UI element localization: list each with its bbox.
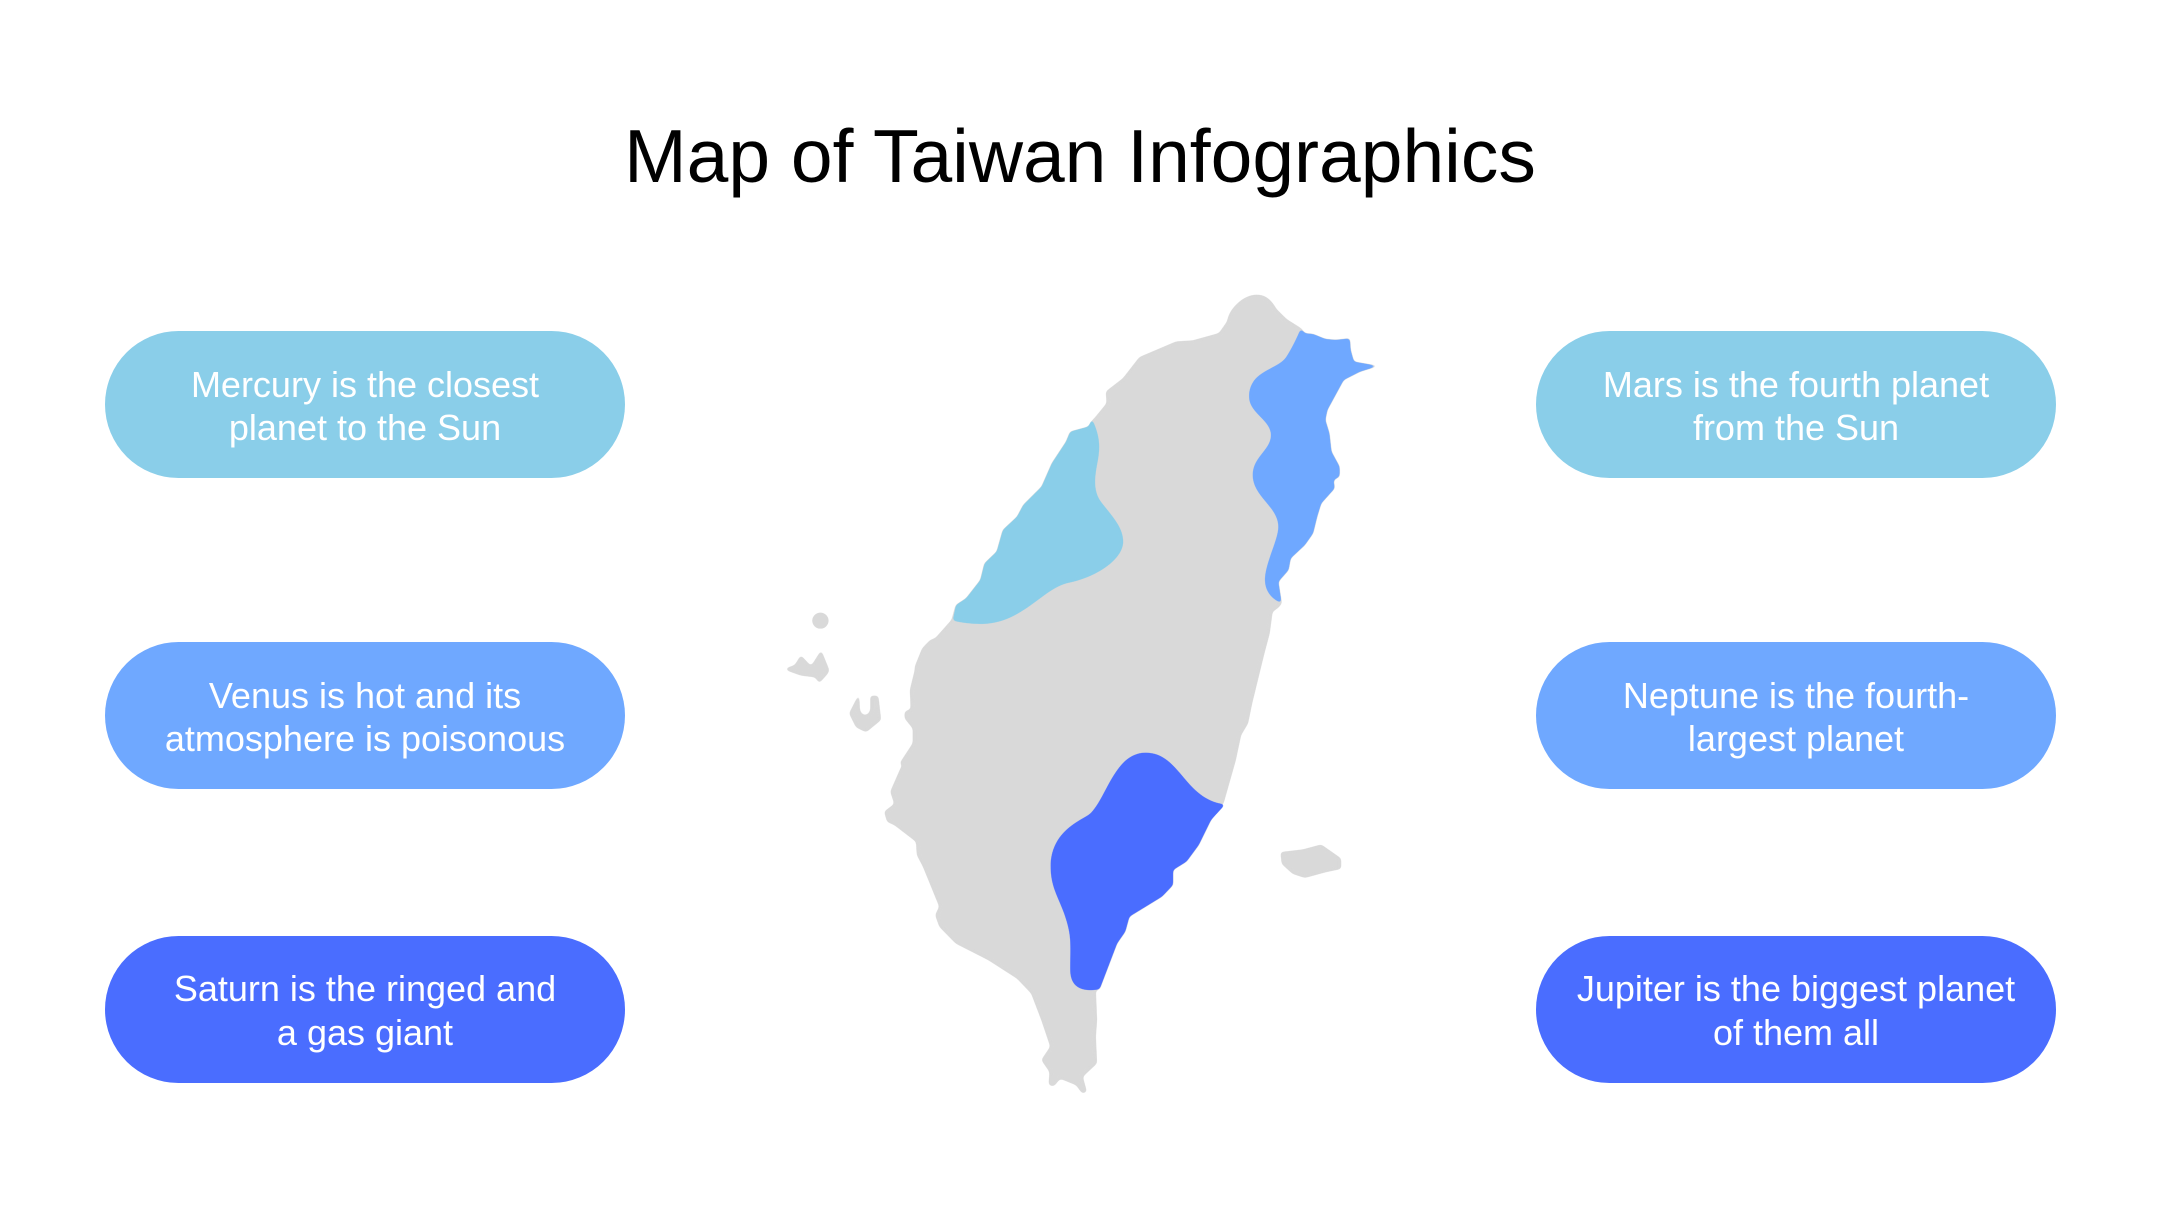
map: northeast highlighted region — [1249, 328, 1378, 603]
pill: Saturn: a gas giant — [277, 1012, 453, 1052]
map: small western islet — [849, 693, 881, 732]
pill: Venus — [105, 642, 625, 789]
pill: Jupiter: of them all — [1713, 1012, 1879, 1052]
pill: Venus: atmosphere is poisonous — [165, 718, 565, 759]
map: Penghu islands — [785, 650, 829, 683]
pill: Jupiter — [1536, 936, 2056, 1082]
pill: Saturn — [105, 936, 625, 1082]
pill: Mars: from the Sun — [1693, 407, 1899, 448]
map: Orchid island — [1280, 844, 1341, 878]
map: island dot — [812, 613, 829, 629]
map: main island — [884, 295, 1378, 1093]
map: southeast highlighted region — [1051, 753, 1225, 990]
pill: Mars — [1536, 331, 2056, 478]
pill: Mercury — [105, 331, 625, 478]
pill: Mercury: Mercury is the closest — [191, 364, 539, 405]
title: Map of Taiwan Infographics — [624, 114, 1536, 198]
pill: Jupiter: Jupiter is the biggest planet — [1577, 968, 2015, 1009]
pill: Neptune: Neptune is the fourth- — [1623, 675, 1969, 716]
map: northwest highlighted region — [953, 418, 1123, 624]
pill: Mercury: planet to the Sun — [229, 407, 501, 448]
pill: Neptune — [1536, 642, 2056, 789]
pill: Mars: Mars is the fourth planet — [1603, 364, 1989, 405]
pill: Venus: Venus is hot and its — [209, 675, 521, 716]
pill: Saturn: Saturn is the ringed and — [174, 968, 556, 1009]
pill: Neptune: largest planet — [1688, 718, 1904, 759]
